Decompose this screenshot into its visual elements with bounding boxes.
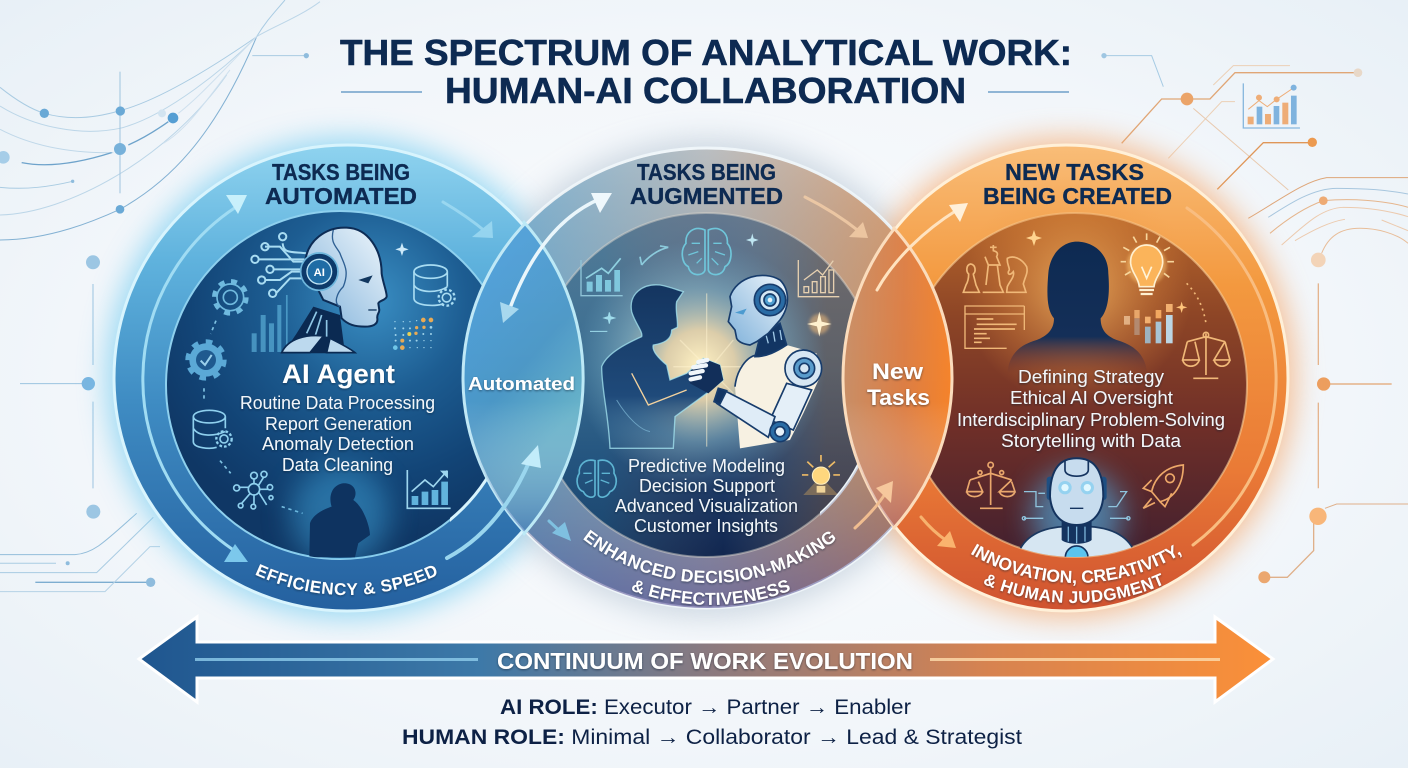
arrow: augmented upper left double headed	[500, 193, 612, 323]
icon: browser window	[965, 306, 1024, 348]
icon: sparkle	[395, 243, 409, 256]
arrow: automated bottom right into lens	[447, 445, 541, 558]
icon: small marks	[590, 312, 615, 331]
text: created list: Interdisciplinary Problem-Solving	[957, 410, 1225, 430]
text: human role: HUMAN ROLE: Minimal → Collaborator → Lead & Strategist	[402, 726, 1022, 749]
icon: rocket	[1143, 465, 1183, 508]
icon: network	[234, 471, 273, 509]
heading: new tasks being created: NEW TASKS	[1005, 159, 1144, 185]
text: AI agent list: Anomaly Detection	[262, 434, 414, 454]
icon: balance scale	[1183, 332, 1230, 378]
arrow: created bottom left	[921, 517, 956, 548]
ring label: enhanced decision making: ENHANCED DECISION-MAKING	[582, 530, 836, 586]
ring overlap: automated ring lower part passes over augmented	[450, 478, 504, 588]
ring label: innovation creativity human judgment	[970, 544, 1183, 606]
ring label: innovation creativity human judgment: & HUMAN JUDGMENT	[982, 573, 1162, 606]
circuit lines: lower right	[1258, 283, 1408, 583]
arrow: augmented bottom left	[549, 521, 571, 541]
arrow: augmented bottom right	[855, 481, 893, 528]
arrow: automated top right	[443, 202, 493, 238]
text: augmented list: Decision Support	[639, 476, 775, 496]
heading: new tasks being created: BEING CREATED	[983, 183, 1172, 209]
text: augmented list: Advanced Visualization	[615, 496, 798, 516]
text: AI role: AI ROLE: Executor → Partner → Enabler	[500, 696, 911, 719]
text: augmented list	[615, 456, 798, 536]
label: new tasks: New	[872, 359, 924, 384]
figures: handshake	[602, 275, 822, 448]
title: HUMAN-AI COLLABORATION	[445, 70, 966, 111]
text: augmented list: Customer Insights	[634, 516, 778, 536]
arrowhead: automated upper	[226, 195, 247, 214]
text: created list: Storytelling with Data	[1001, 431, 1182, 451]
icon: circuit nodes	[251, 233, 307, 297]
ring label: enhanced decision making	[582, 530, 836, 608]
ring overlap: augmented ring lower part passes over created	[820, 464, 892, 582]
icon: sparkle	[746, 233, 759, 247]
heading: tasks being automated	[265, 159, 417, 209]
ring: created	[844, 145, 1288, 611]
circuit lines: top left	[0, 0, 320, 269]
text: AI agent list: Data Cleaning	[282, 455, 393, 475]
ring: automated	[114, 145, 580, 611]
dashed connectors	[204, 321, 303, 513]
heading: tasks being augmented	[630, 159, 783, 209]
icon: light bulb	[1121, 233, 1174, 294]
text: created list: Ethical AI Oversight	[1010, 388, 1173, 408]
icon: brain lower	[577, 460, 616, 497]
icon: light bulb	[802, 455, 840, 495]
icon: database and gear	[414, 265, 455, 306]
text: AI agent list: Routine Data Processing	[240, 393, 435, 413]
icon: right chart	[798, 260, 839, 297]
arc: created right	[1187, 208, 1276, 545]
icon: chess pieces	[963, 245, 1027, 292]
heading: tasks being automated: AUTOMATED	[265, 183, 417, 209]
icon: database with gear	[193, 410, 232, 448]
icon: clasped hands	[688, 358, 723, 393]
icons: created	[963, 230, 1230, 508]
icon: brain top	[682, 228, 731, 275]
light rays	[673, 293, 747, 447]
label: new tasks	[867, 359, 930, 410]
circuit lines and chart: top right	[1101, 53, 1408, 267]
icon: top right bar chart	[1243, 83, 1300, 128]
icons: augmented	[577, 228, 840, 497]
icon: robot head	[282, 228, 387, 353]
circle glows	[106, 137, 1296, 619]
icon: double arrow	[640, 246, 668, 265]
icons: automated	[188, 228, 455, 513]
figure: robot	[714, 275, 822, 448]
text: AI agent list	[240, 359, 435, 475]
title: THE SPECTRUM OF ANALYTICAL WORK:	[340, 32, 1072, 73]
disc: created	[903, 213, 1247, 557]
icon: person on phone	[290, 465, 390, 565]
icon: dot grid	[393, 318, 433, 350]
panel: tasks being augmented	[464, 148, 950, 608]
overlap: new tasks lens	[842, 228, 950, 528]
icon: spark and bars	[1124, 302, 1187, 343]
icon: robot head: AI	[314, 267, 325, 279]
panel: tasks being automated	[112, 144, 523, 612]
figure: human silhouette	[602, 285, 723, 448]
icon: warm sparkle	[807, 312, 832, 337]
label: new tasks: Tasks	[867, 385, 930, 410]
arrow: continuum of work evolution	[139, 617, 1273, 702]
text: created list	[957, 367, 1225, 451]
icon: background bars	[252, 295, 288, 352]
text: augmented list: Predictive Modeling	[628, 456, 785, 476]
arrow: augmented top right	[805, 197, 868, 238]
ring label: innovation creativity human judgment: INNOVATION, CREATIVITY,	[970, 544, 1183, 588]
figure: human silhouette	[1007, 242, 1147, 373]
label: automated: Automated	[468, 374, 575, 394]
icon: sparkle	[1026, 230, 1042, 246]
ring arrows	[143, 193, 1276, 562]
title	[340, 32, 1072, 111]
heading: tasks being augmented: TASKS BEING	[637, 159, 776, 185]
icon: bottom robot	[1017, 458, 1137, 569]
overlap edge: automated lens right edge	[523, 221, 583, 535]
overlap edge: new tasks lens right edge	[893, 227, 952, 529]
text: AI agent list: AI Agent	[282, 359, 395, 389]
arrow: created upper left	[877, 203, 968, 290]
disc: augmented	[534, 213, 878, 557]
icon: filled gear	[188, 342, 224, 378]
ring label: enhanced decision making: & EFFECTIVENESS	[631, 580, 791, 608]
text: AI agent list: Report Generation	[265, 414, 412, 434]
arrowhead: automated lower	[224, 544, 248, 562]
icon: left chart	[581, 258, 623, 296]
icon: justice scale	[967, 462, 1015, 508]
icon: dotted arc	[1187, 283, 1206, 323]
icon: outlined gear	[214, 281, 246, 313]
heading: tasks being augmented: AUGMENTED	[630, 183, 783, 209]
heading: new tasks being created	[983, 159, 1172, 209]
text: created list: Defining Strategy	[1018, 367, 1164, 387]
ring label: efficiency and speed: EFFICIENCY & SPEED	[254, 564, 438, 598]
ring: augmented	[464, 148, 950, 608]
panel: new tasks being created	[895, 144, 1290, 612]
disc: automated	[166, 211, 514, 559]
circuit lines: lower left	[0, 284, 160, 592]
arrow: automated left arc	[143, 207, 236, 549]
label: continuum: CONTINUUM OF WORK EVOLUTION	[497, 648, 913, 674]
overlap: automated lens	[462, 224, 582, 532]
icon: growth chart	[407, 470, 451, 508]
heading: tasks being automated: TASKS BEING	[272, 159, 410, 185]
